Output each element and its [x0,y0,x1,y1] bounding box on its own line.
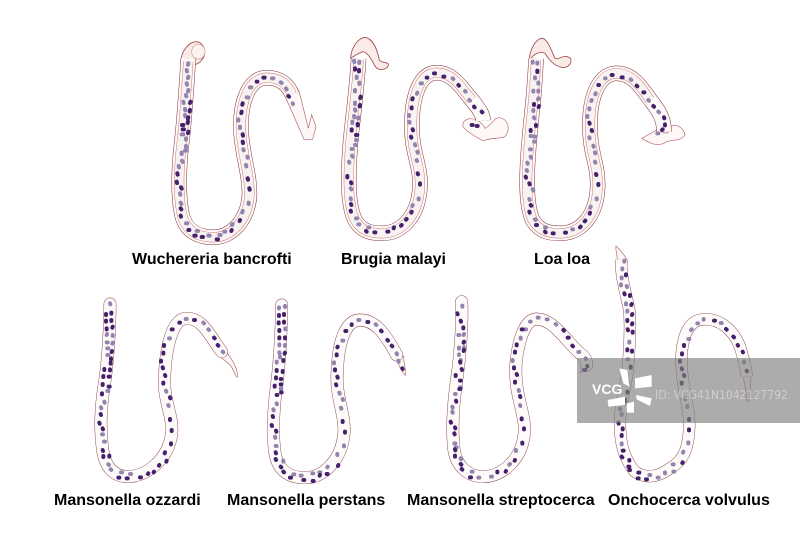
worm: Onchocerca volvulus [616,246,751,479]
label: Mansonella ozzardi: Mansonella ozzardi [54,492,201,509]
worm: Wuchereria bancrofti [177,42,316,239]
worm: Mansonella perstans [272,305,406,481]
watermark logo text: VCG [592,381,622,397]
label: Loa loa: Loa loa [534,251,590,268]
watermark id text: ID: VCG41N1042127792 [655,388,788,402]
label: Wuchereria bancrofti: Wuchereria bancrofti [132,251,292,268]
watermark band [577,358,800,423]
label: Mansonella perstans: Mansonella perstans [227,492,385,509]
label: Mansonella streptocerca: Mansonella streptocerca [407,492,595,509]
label: Onchocerca volvulus: Onchocerca volvulus [608,492,770,509]
worm: Mansonella ozzardi [99,303,237,478]
watermark logo mark [608,368,652,413]
worm: Brugia malayi [347,37,508,233]
worm: Loa loa [526,38,685,233]
worm: Mansonella streptocerca [451,302,588,478]
label: Brugia malayi: Brugia malayi [341,251,446,268]
